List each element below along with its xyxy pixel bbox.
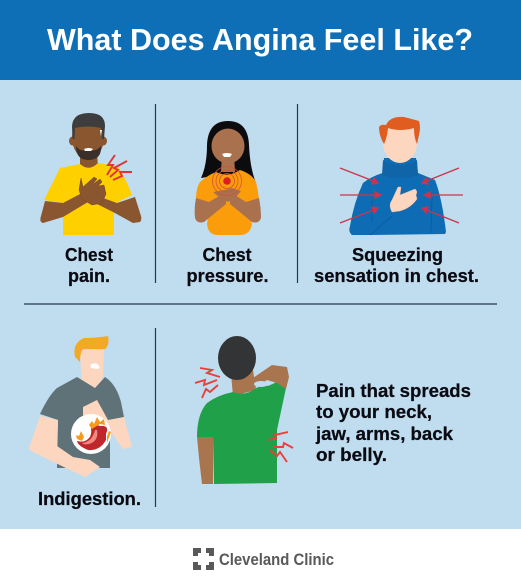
label: indigestion: Indigestion.	[38, 488, 141, 509]
icon: man with inward arrows	[340, 117, 463, 235]
title banner: What Does Angina Feel Like?	[47, 22, 473, 57]
text: pain spreads: Pain that spreads	[316, 380, 471, 401]
label: chest pressure: pressure.	[186, 265, 268, 286]
logo: Cleveland Clinic	[193, 548, 334, 570]
label: chest pressure: Chest	[202, 244, 252, 265]
icon: woman with pressure rings on chest	[195, 121, 261, 235]
label: squeezing sensation: sensation in chest.	[314, 265, 479, 286]
panel: spreading pain	[195, 336, 471, 484]
text: pain spreads: jaw, arms, back	[315, 423, 454, 444]
panel: squeezing sensation	[314, 117, 479, 286]
panel: chest pain	[40, 113, 141, 286]
label: chest pain: pain.	[68, 265, 110, 286]
icon: person with back and neck pain	[195, 336, 293, 484]
icon: man holding chest	[40, 113, 141, 235]
icon: man with burning stomach	[29, 336, 132, 477]
label: squeezing sensation: Squeezing	[352, 244, 443, 265]
label: chest pain: Chest	[65, 244, 113, 265]
text: pain spreads: or belly.	[316, 444, 387, 465]
panel: light blue body background	[0, 80, 521, 529]
text: pain spreads: to your neck,	[316, 401, 432, 422]
icon: logo cross	[193, 548, 214, 570]
panel: chest pressure	[186, 121, 268, 286]
title banner	[0, 0, 521, 80]
panel: indigestion	[29, 336, 141, 509]
text: logo wordmark: Cleveland Clinic	[219, 550, 334, 569]
